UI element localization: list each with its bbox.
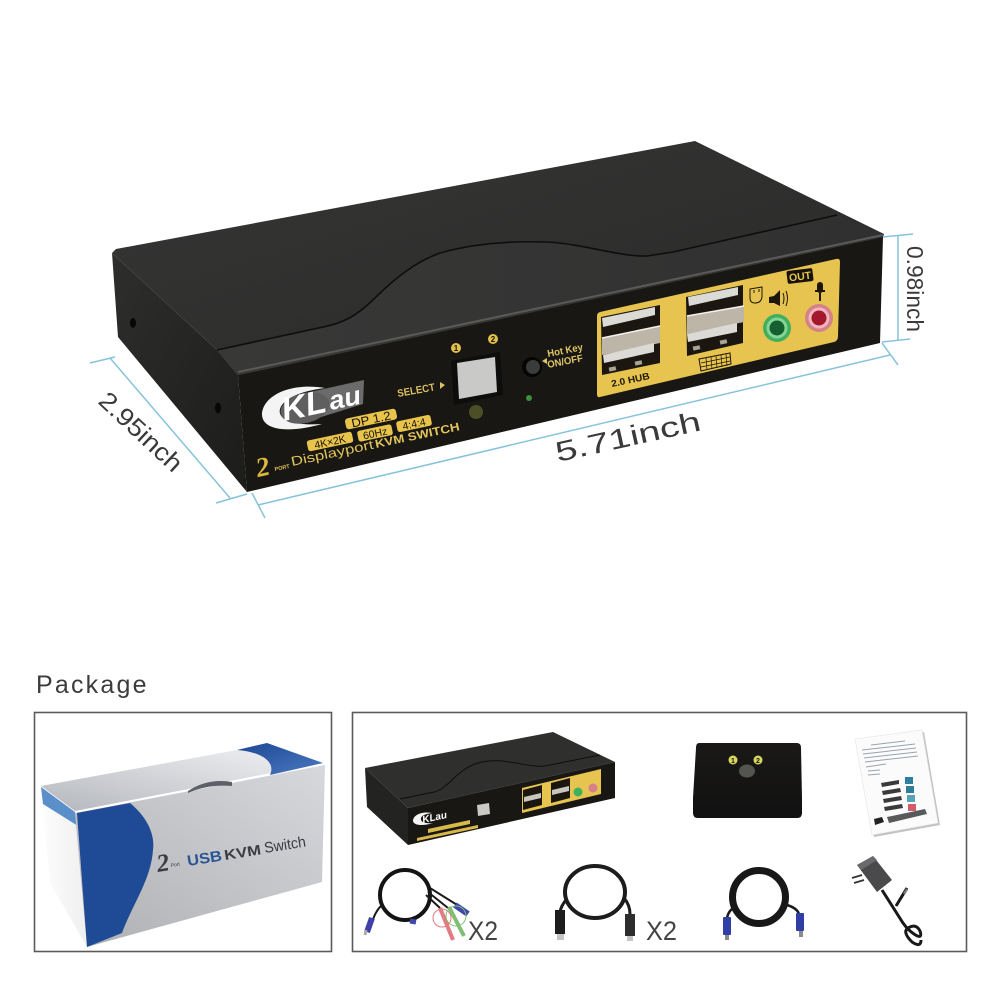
front panel <box>238 237 883 492</box>
select button group: 1 <box>454 344 459 353</box>
2.0 HUB label: 2.0 HUB <box>610 371 651 390</box>
contents: DisplayPort cable <box>555 866 635 941</box>
select button group <box>396 334 503 419</box>
box lid blue corner <box>237 743 323 775</box>
KLau logo: KL <box>278 382 329 428</box>
KLau logo: au <box>326 380 364 416</box>
contents: KVM switch: KLau <box>421 810 448 826</box>
box blue wave <box>77 803 153 947</box>
box lid <box>41 743 323 811</box>
quantity label: audio cable: X2 <box>468 916 498 946</box>
spec badges <box>306 407 433 453</box>
panel: retail box <box>34 712 332 952</box>
top cover <box>112 141 884 375</box>
screw holes <box>130 318 221 414</box>
box printed name: Port <box>170 862 181 869</box>
box blue flap <box>41 787 78 826</box>
lid seam line <box>217 215 837 350</box>
box front face <box>75 765 325 947</box>
right USB ports <box>686 285 744 356</box>
spec badges: 4:4:4 <box>402 416 427 433</box>
select button group: SELECT <box>396 381 436 400</box>
contents: wired remote: 2 <box>756 758 760 765</box>
contents: power adapter <box>852 856 921 945</box>
box printed name <box>154 834 307 878</box>
OUT badge: OUT <box>788 270 812 284</box>
hot key button: ON/OFF <box>546 353 584 371</box>
select button group: 2 <box>491 335 496 344</box>
product name text <box>252 421 461 483</box>
main product: KVM switch <box>112 141 884 492</box>
contents: wired remote <box>693 743 802 818</box>
contents: wired remote: 1 <box>731 758 735 765</box>
quantity label: DisplayPort cable: X2 <box>646 916 677 946</box>
box printed name: 2 <box>154 849 171 878</box>
yellow port panel <box>597 259 840 397</box>
contents: KVM switch <box>365 732 615 845</box>
front bevel highlight <box>238 235 883 372</box>
left side of chassis <box>112 253 247 492</box>
pink mic jack <box>805 304 833 332</box>
product name text: KVM SWITCH <box>374 421 461 451</box>
box printed name: Switch <box>263 834 307 857</box>
heading: Package: Package <box>36 671 149 699</box>
contents: remote USB cable <box>723 870 804 940</box>
keyboard icon <box>699 353 731 371</box>
dimension label: height: 0.98inch <box>902 246 928 332</box>
green audio jack <box>763 314 791 342</box>
box left end <box>41 787 87 947</box>
hot key button <box>522 342 584 401</box>
spec badges: DP 1.2 <box>350 408 392 430</box>
dimension label: width: 2.95inch <box>93 386 188 478</box>
product name text: PORT <box>274 464 291 473</box>
microphone icon <box>815 282 825 301</box>
box printed name: KVM <box>223 841 262 863</box>
spec badges: 4K×2K <box>313 433 347 452</box>
contents: user manual <box>855 730 940 837</box>
product name text: Displayport <box>290 437 375 469</box>
KLau logo <box>262 380 364 429</box>
contents: USB and audio cable <box>365 870 468 940</box>
panel: package contents <box>352 712 966 952</box>
spec badges: 60Hz <box>362 426 388 442</box>
left USB hub ports <box>601 305 660 375</box>
lower lid with curved cutout <box>217 215 884 375</box>
speaker icon <box>769 290 788 306</box>
box printed name: USB <box>186 848 223 870</box>
box lid tab <box>188 781 232 793</box>
dimension lines <box>90 234 913 518</box>
dimension label: length: 5.71inch <box>552 406 704 468</box>
hot key button: Hot Key <box>546 342 584 360</box>
mouse icon <box>750 287 762 303</box>
product name text: 2 <box>252 451 272 483</box>
